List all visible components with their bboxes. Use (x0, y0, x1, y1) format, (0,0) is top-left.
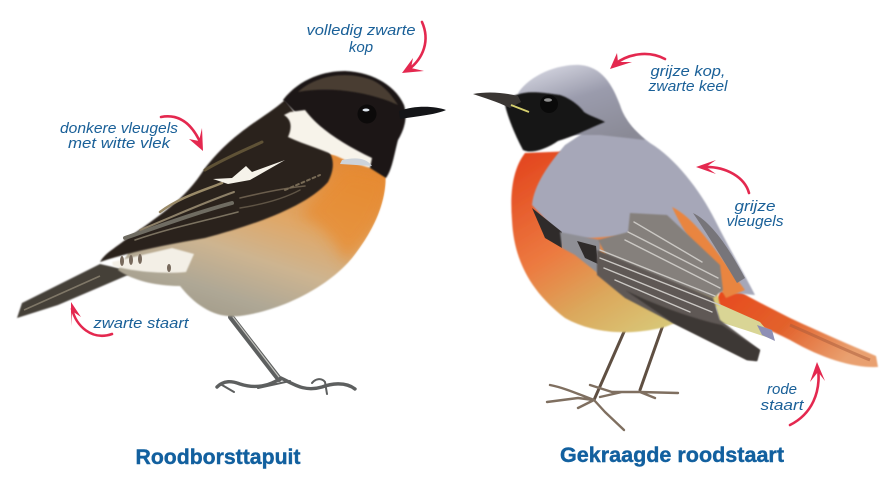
annotation: grijze vleugels: grijze (734, 198, 776, 215)
stonechat tail (17, 264, 135, 318)
annotation: rode staart: rode (767, 381, 797, 398)
lower grey band (560, 232, 600, 275)
beak (473, 93, 521, 108)
annotation: rode staart (760, 362, 825, 425)
white collar (284, 110, 372, 168)
arrow (161, 116, 203, 151)
wing feather streaks (125, 142, 320, 240)
wing tertials (598, 213, 723, 298)
red tail (715, 282, 878, 367)
annotation: grijze kop, zwarte keel: grijze kop, (650, 63, 726, 80)
head (283, 71, 406, 178)
annotation: volledig zwarte kop (306, 22, 426, 73)
pale undertail (715, 302, 775, 340)
annotation: donkere vleugels met witte vlek (60, 116, 203, 152)
title: Gekraagde roodstaart: Gekraagde roodstaart (560, 444, 784, 467)
annotation: volledig zwarte kop: volledig zwarte (306, 22, 416, 39)
annotation: rode staart: staart (760, 397, 804, 414)
stonechat belly and breast (118, 150, 386, 316)
beak (399, 107, 446, 119)
dark wing bar (532, 208, 562, 248)
orange breast patch (300, 165, 392, 262)
title: Roodborsttapuit: Roodborsttapuit (136, 446, 300, 469)
annotation: zwarte staart: zwarte staart (92, 315, 189, 332)
arrow (71, 302, 112, 336)
annotation: grijze vleugels (696, 160, 784, 230)
black face and throat (505, 92, 605, 152)
wing feather stripes (600, 222, 720, 312)
head grey (518, 65, 645, 140)
annotation: grijze vleugels: vleugels (726, 213, 784, 230)
annotation: donkere vleugels met witte vlek: donkere vleugels (60, 120, 179, 137)
stonechat legs and feet (217, 317, 355, 394)
orange wing edge and dark primaries (672, 207, 745, 298)
arrow (402, 22, 426, 73)
annotation: grijze kop, zwarte keel (610, 53, 728, 95)
arrow (610, 53, 665, 69)
wing primaries (597, 250, 760, 361)
arrow (696, 160, 749, 193)
white rump (112, 248, 194, 273)
redstart legs and feet (547, 325, 678, 430)
bird: Gekraagde roodstaart (redstart) (473, 65, 878, 430)
eye (540, 95, 558, 113)
arrow (790, 362, 825, 425)
crown highlight (298, 75, 398, 105)
eye (358, 104, 376, 124)
annotation: zwarte staart (71, 302, 189, 336)
annotation: grijze kop, zwarte keel: zwarte keel (647, 78, 728, 95)
back and mantle grey (532, 118, 755, 295)
belly and breast (511, 150, 720, 332)
dark wing and back (100, 100, 333, 262)
annotation: volledig zwarte kop: kop (349, 39, 373, 56)
bird: Roodborsttapuit (stonechat) (17, 71, 446, 394)
white wing patch (213, 160, 285, 184)
annotation: donkere vleugels met witte vlek: met witte vlek (68, 135, 172, 152)
